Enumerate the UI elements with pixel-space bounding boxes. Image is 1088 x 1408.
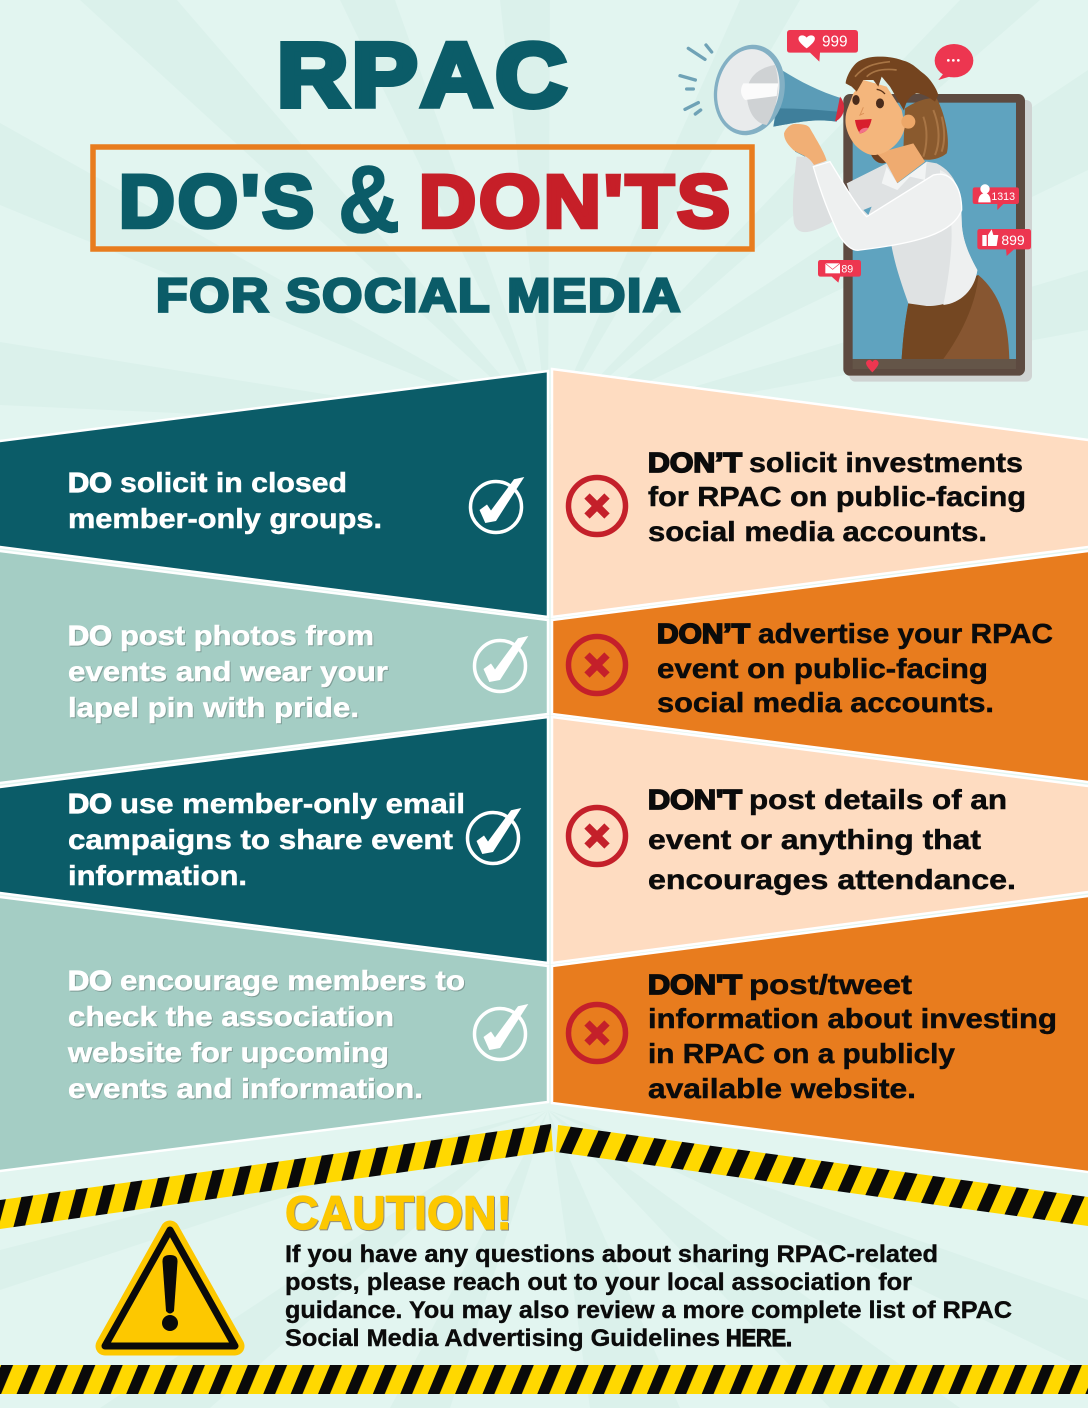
panel: do 3: use member-only email [120, 788, 465, 819]
heading box: Do's and Don'ts: & [338, 146, 400, 253]
panel: don't 3: post details of an [749, 784, 1007, 815]
panel: do 2: DO [68, 620, 112, 651]
panel: don't 3: DON'T [648, 784, 742, 815]
panel: do 3: DO [68, 788, 112, 819]
panel: don't 4: available website. [648, 1073, 916, 1104]
panel: don't 4: DON'T [648, 969, 742, 1000]
panel: don't 1 [552, 369, 1088, 617]
panel: do 4: website for upcoming [67, 1037, 389, 1068]
illustration: woman with megaphone emerging from phone: 89 [841, 264, 853, 276]
subtitle: for social media: FOR SOCIAL MEDIA [156, 268, 682, 322]
illustration: woman with megaphone emerging from phone [680, 30, 1032, 382]
icon: check [470, 477, 524, 532]
panel: don't 2: event on public-facing [657, 653, 988, 684]
caution tape: bottom [0, 1365, 1088, 1394]
panel: don't 3 [552, 717, 1088, 963]
panel: do 1: DO [68, 467, 112, 498]
panel: do 1: member-only groups. [68, 503, 382, 534]
illustration: woman with megaphone emerging from phone: 999 [822, 34, 848, 51]
heading box: Do's and Don'ts: DO'S [119, 160, 317, 243]
icon: warning triangle [105, 1230, 235, 1346]
heading box: Do's and Don'ts [93, 146, 752, 253]
panel: do 1 [0, 371, 548, 617]
icon: x [568, 808, 626, 864]
icon: x [568, 1004, 626, 1062]
panel: don't 1: for RPAC on public-facing [648, 481, 1026, 512]
panel: do 4: check the association [68, 1001, 394, 1032]
text: caution body: If you have any questions about sharing RPAC-related [285, 1241, 938, 1268]
icon: check [474, 1004, 528, 1060]
text: caution body: Social Media Advertising Guidelines [285, 1325, 720, 1352]
panel: don't 4: in RPAC on a publicly [648, 1038, 955, 1069]
panel: don't 4: post/tweet [749, 969, 912, 1000]
text: caution body: guidance. You may also review a more complete list of RPAC [285, 1297, 1012, 1324]
panel: do 4 [0, 896, 548, 1172]
panel: don't 4 [552, 895, 1088, 1173]
illustration: woman with megaphone emerging from phone: 1313 [991, 191, 1015, 203]
panel: don't 3: encourages attendance. [648, 864, 1016, 895]
icon: check [474, 636, 528, 692]
panel: don't 2: advertise your RPAC [758, 618, 1053, 649]
text: caution body: HERE. [726, 1325, 792, 1352]
panel: don't 1: social media accounts. [648, 516, 987, 547]
panel: don't 3: event or anything that [648, 824, 981, 855]
panel: do 4: events and information. [68, 1073, 423, 1104]
panel: don't 4: information about investing [648, 1003, 1057, 1034]
icon: check [468, 808, 521, 864]
panel: do 1: solicit in closed [120, 467, 347, 498]
text: caution body [285, 1241, 1012, 1352]
caution tape: left [0, 1124, 553, 1229]
panel: don't 2: social media accounts. [657, 687, 994, 718]
panel: don't 1: solicit investments [749, 447, 1023, 478]
panel: do 3: information. [68, 860, 247, 891]
illustration: woman with megaphone emerging from phone: 899 [1001, 232, 1025, 248]
panel: do 3: campaigns to share event [68, 824, 453, 855]
icon: x [568, 478, 626, 534]
panel: do 4: encourage members to [120, 965, 465, 996]
panel: do 2: events and wear your [68, 656, 388, 687]
icon: x [568, 636, 626, 694]
panel: do 2: lapel pin with pride. [68, 692, 359, 723]
panel: do 2: post photos from [120, 620, 374, 651]
heading box: Do's and Don'ts: DON'TS [419, 160, 733, 243]
heading: caution: CAUTION! [285, 1186, 512, 1239]
title: RPAC: RPAC [277, 26, 570, 126]
panel: don't 2: DON’T [657, 618, 750, 649]
panel: do 4: DO [68, 965, 112, 996]
panel: don't 1: DON’T [648, 447, 742, 478]
caution tape: right [556, 1125, 1088, 1226]
panel: don't 2 [552, 550, 1088, 783]
text: caution body: posts, please reach out to your local association for [285, 1269, 912, 1296]
panel: do 2 [0, 550, 548, 784]
panel: do 3 [0, 717, 548, 963]
